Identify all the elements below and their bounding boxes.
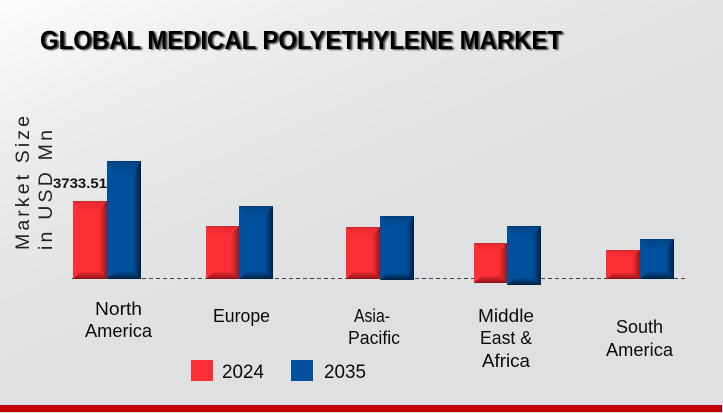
title: GLOBAL MEDICAL POLYETHYLENE MARKET <box>40 25 562 55</box>
category label: South America: America <box>606 339 674 360</box>
y axis title <box>12 116 57 250</box>
category label: Europe: Europe <box>213 305 270 326</box>
category label: Middle East & Africa <box>478 305 534 371</box>
category label: North America: North <box>95 298 142 319</box>
y axis title: Market Size <box>12 116 34 250</box>
title: GLOBAL MEDICAL POLYETHYLENE MARKET <box>42 26 564 56</box>
bars: Middle East & Africa <box>474 226 541 285</box>
legend item: 2035: 2035 <box>324 362 366 383</box>
category label: Asia-Pacific <box>348 305 400 348</box>
bars: Europe <box>206 206 273 279</box>
category label: Middle East & Africa: Africa <box>482 350 531 371</box>
bars: North America <box>73 161 141 279</box>
legend item: 2024: 2024 <box>222 362 264 383</box>
category label: North America: America <box>85 320 153 341</box>
footer bar <box>0 405 722 412</box>
legend item: 2024 <box>191 360 264 383</box>
category label: South America <box>606 316 674 360</box>
category label: Asia-Pacific: Pacific <box>348 327 400 348</box>
y axis title: in USD Mn <box>35 130 57 250</box>
value label: 3733.51 <box>53 175 107 191</box>
category label: North America <box>85 298 153 341</box>
legend <box>191 360 366 383</box>
legend item: 2035 <box>291 360 366 383</box>
category label: Middle East & Africa: East & <box>480 327 533 348</box>
category label: South America: South <box>616 316 663 337</box>
category label: Middle East & Africa: Middle <box>478 305 534 326</box>
bars: South America <box>606 239 674 279</box>
bar chart <box>73 161 674 285</box>
bars: Asia-Pacific <box>346 216 414 280</box>
baseline <box>72 278 686 280</box>
category label: Asia-Pacific: Asia- <box>354 305 390 326</box>
